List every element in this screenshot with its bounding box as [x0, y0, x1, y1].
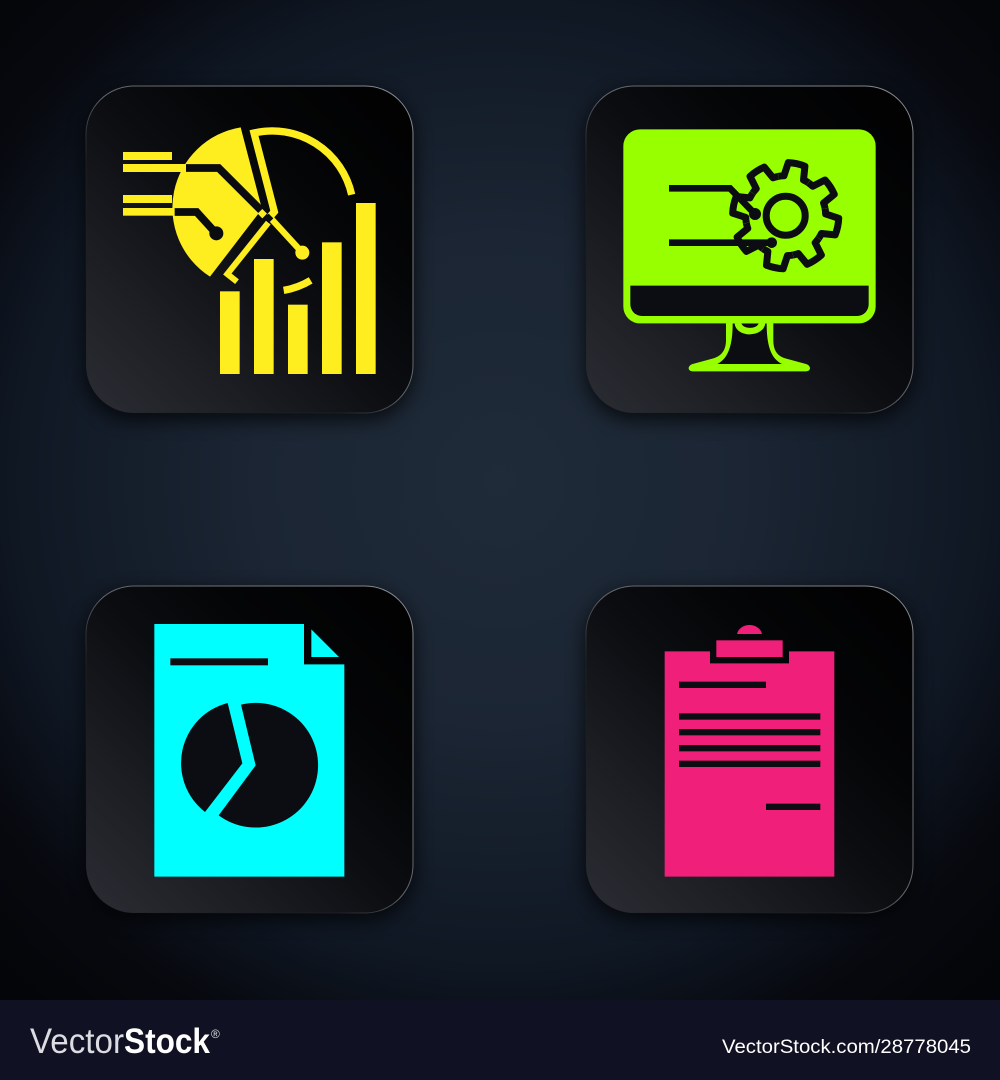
panel: clipboard tile: [584, 586, 915, 921]
icon: pink clipboard with text lines: [665, 625, 834, 877]
gear: [731, 161, 841, 271]
icon: yellow pie chart with circuit lines and bars: [123, 127, 376, 374]
footer image id: VectorStock.com/28778045: [722, 1037, 971, 1058]
panel: document pie chart tile: [84, 586, 415, 921]
footer logo: [30, 1022, 220, 1061]
footer bar: [0, 1000, 1000, 1080]
monitor body: [623, 129, 876, 371]
circuit wires: [669, 188, 774, 245]
panel: monitor settings tile: [584, 86, 915, 421]
panel: pie and bar analytics tile: [84, 86, 415, 421]
footer logo: ®: [211, 1027, 220, 1041]
footer logo: Vector: [30, 1022, 124, 1061]
footer logo: Stock: [124, 1022, 210, 1061]
icon: cyan document with pie chart: [154, 624, 344, 877]
icon: green monitor with gear: [623, 129, 876, 371]
